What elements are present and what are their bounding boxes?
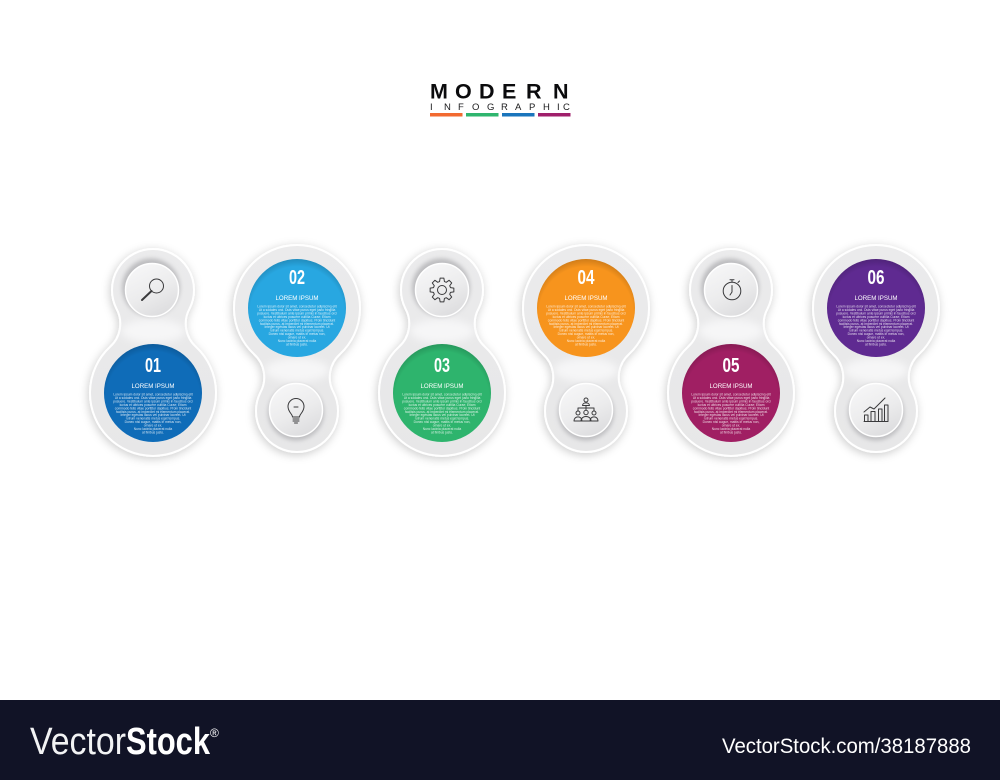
step 04 panel xyxy=(523,245,649,452)
colored circle 04: LOREM IPSUM xyxy=(564,295,608,302)
colored circle 01: Integer egestas lacus vel pulvinar laoreet. Ut xyxy=(120,413,186,417)
vectorstock logo xyxy=(30,721,219,763)
colored circle 05: rutrum venenatis metus eget tempus. xyxy=(704,417,758,421)
colored circle 03: Ut a sodales orci. Duis vitae purus eget justo fringilla xyxy=(404,396,480,400)
colored circle 06: at finibus justo. xyxy=(865,342,887,346)
footer: watermark bar xyxy=(0,700,1000,780)
button with growth chart icon xyxy=(848,384,904,440)
colored circle 03: posuere. Vestibulum ante ipsum primis in faucibus orci xyxy=(402,399,482,403)
colored circle 03: 03 xyxy=(434,355,450,377)
colored circle 01: luctus et ultrices posuere cubilia Curae; Etiam xyxy=(120,403,187,407)
button with team hierarchy icon xyxy=(558,384,614,440)
step 03 panel xyxy=(379,249,505,456)
colored circle 01: commodo felis vitae porttitor dapibus. Proin tincidunt xyxy=(115,406,191,410)
vectorstock logo: Stock xyxy=(126,721,211,763)
vectorstock logo: ® xyxy=(210,726,219,740)
colored circle 05: luctus et ultrices posuere cubilia Curae; Etiam xyxy=(698,403,765,407)
step 01 panel xyxy=(90,249,216,456)
colored circle 04: luctus et ultrices posuere cubilia Curae; Etiam xyxy=(553,315,620,319)
vectorstock logo: Vector xyxy=(30,721,126,763)
colored circle 04: 04 xyxy=(578,267,595,289)
colored circle 03: Nunc lacinia placerat nulla xyxy=(423,427,461,431)
colored circle 05: commodo felis vitae porttitor dapibus. Proin tincidunt xyxy=(693,406,769,410)
colored circle 06: Integer egestas lacus vel pulvinar laoreet. Ut xyxy=(843,325,909,329)
colored circle 06: posuere. Vestibulum ante ipsum primis in faucibus orci xyxy=(836,311,916,315)
colored circle 05: posuere. Vestibulum ante ipsum primis in faucibus orci xyxy=(691,399,771,403)
colored circle 05: at finibus justo. xyxy=(720,430,742,434)
colored circle 05: Integer egestas lacus vel pulvinar laoreet. Ut xyxy=(698,413,764,417)
button with stopwatch icon xyxy=(701,258,759,316)
colored circle 06: commodo felis vitae porttitor dapibus. Proin tincidunt xyxy=(838,318,914,322)
colored circle 05: facilisis purus, at imperdiet mi elementum placerat. xyxy=(694,410,768,414)
title: modern infographic logo xyxy=(430,80,570,116)
colored circle 03: ornare ut ex. xyxy=(433,424,451,428)
colored circle 06: Ut a sodales orci. Duis vitae purus eget justo fringilla xyxy=(838,308,914,312)
colored circle 02: posuere. Vestibulum ante ipsum primis in faucibus orci xyxy=(257,311,337,315)
colored circle 03: Lorem ipsum dolor sit amet, consectetur adipiscing elit xyxy=(402,392,482,396)
colored circle 05: Nunc lacinia placerat nulla xyxy=(712,427,750,431)
colored circle 01 xyxy=(104,344,202,442)
colored circle 04 xyxy=(537,259,635,357)
vectorstock image id: VectorStock.com/38187888 xyxy=(722,735,971,758)
colored circle 04: commodo felis vitae porttitor dapibus. Proin tincidunt xyxy=(548,318,624,322)
colored circle 04: Donec nisl augue, mattis in metus non, xyxy=(558,332,614,336)
colored circle 01: Ut a sodales orci. Duis vitae purus eget justo fringilla xyxy=(115,396,191,400)
colored circle 03: commodo felis vitae porttitor dapibus. Proin tincidunt xyxy=(404,406,480,410)
colored circle 02: 02 xyxy=(289,267,305,289)
colored circle 02: LOREM IPSUM xyxy=(276,295,318,302)
colored circle 03: facilisis purus, at imperdiet mi elementum placerat. xyxy=(405,410,479,414)
step 06 panel xyxy=(813,245,939,452)
colored circle 06: 06 xyxy=(868,267,884,289)
colored circle 05: LOREM IPSUM xyxy=(710,383,752,390)
colored circle 04: Ut a sodales orci. Duis vitae purus eget justo fringilla xyxy=(548,308,624,312)
colored circle 02: Donec nisl augue, mattis in metus non, xyxy=(269,332,325,336)
colored circle 05: ornare ut ex. xyxy=(722,424,740,428)
title: modern infographic logo: MODERN xyxy=(430,80,569,104)
colored circle 06: Donec nisl augue, mattis in metus non, xyxy=(848,332,904,336)
colored circle 02: at finibus justo. xyxy=(286,342,308,346)
colored circle 01: 01 xyxy=(145,355,161,377)
colored circle 05: 05 xyxy=(722,355,740,377)
colored circle 02: ornare ut ex. xyxy=(288,336,306,340)
colored circle 04: Lorem ipsum dolor sit amet, consectetur adipiscing elit xyxy=(546,304,626,308)
colored circle 01: at finibus justo. xyxy=(142,430,164,434)
colored circle 01: ornare ut ex. xyxy=(144,424,162,428)
colored circle 05: Ut a sodales orci. Duis vitae purus eget justo fringilla xyxy=(693,396,769,400)
colored circle 05: Lorem ipsum dolor sit amet, consectetur adipiscing elit xyxy=(691,392,771,396)
colored circle 06: facilisis purus, at imperdiet mi elementum placerat. xyxy=(839,322,913,326)
colored circle 03: luctus et ultrices posuere cubilia Curae; Etiam xyxy=(409,403,476,407)
colored circle 01: posuere. Vestibulum ante ipsum primis in faucibus orci xyxy=(113,399,193,403)
colored circle 02: Nunc lacinia placerat nulla xyxy=(278,339,316,343)
colored circle 05: Donec nisl augue, mattis in metus non, xyxy=(703,420,759,424)
colored circle 04: posuere. Vestibulum ante ipsum primis in faucibus orci xyxy=(546,311,626,315)
colored circle 06: rutrum venenatis metus eget tempus. xyxy=(849,329,903,333)
colored circle 03: Integer egestas lacus vel pulvinar laoreet. Ut xyxy=(409,413,475,417)
colored circle 02 xyxy=(248,259,346,357)
colored circle 04: Integer egestas lacus vel pulvinar laoreet. Ut xyxy=(553,325,619,329)
colored circle 02: luctus et ultrices posuere cubilia Curae; Etiam xyxy=(264,315,331,319)
step 02 panel xyxy=(234,245,360,452)
colored circle 04: ornare ut ex. xyxy=(577,336,595,340)
colored circle 01: Donec nisl augue, mattis in metus non, xyxy=(125,420,181,424)
colored circle 05 xyxy=(682,344,780,442)
colored circle 02: Integer egestas lacus vel pulvinar laoreet. Ut xyxy=(264,325,330,329)
button with light bulb icon xyxy=(268,384,324,440)
title: modern infographic logo: INFOGRAPHIC xyxy=(430,102,570,113)
button with magnifier icon xyxy=(122,258,180,316)
colored circle 06: LOREM IPSUM xyxy=(854,295,898,302)
colored circle 01: Lorem ipsum dolor sit amet, consectetur adipiscing elit xyxy=(113,392,193,396)
step 05 panel xyxy=(668,249,794,456)
colored circle 01: rutrum venenatis metus eget tempus. xyxy=(126,417,180,421)
colored circle 02: commodo felis vitae porttitor dapibus. Proin tincidunt xyxy=(259,318,335,322)
colored circle 03: Donec nisl augue, mattis in metus non, xyxy=(414,420,470,424)
colored circle 02: Ut a sodales orci. Duis vitae purus eget justo fringilla xyxy=(259,308,335,312)
colored circle 03 xyxy=(393,344,491,442)
colored circle 06: Nunc lacinia placerat nulla xyxy=(857,339,895,343)
colored circle 02: facilisis purus, at imperdiet mi elementum placerat. xyxy=(260,322,334,326)
colored circle 04: rutrum venenatis metus eget tempus. xyxy=(559,329,613,333)
colored circle 06 xyxy=(827,259,925,357)
colored circle 02: rutrum venenatis metus eget tempus. xyxy=(270,329,324,333)
colored circle 01: LOREM IPSUM xyxy=(132,383,174,390)
colored circle 04: Nunc lacinia placerat nulla xyxy=(567,339,605,343)
colored circle 01: facilisis purus, at imperdiet mi elementum placerat. xyxy=(116,410,190,414)
colored circle 04: at finibus justo. xyxy=(575,342,597,346)
colored circle 06: ornare ut ex. xyxy=(867,336,885,340)
button with gear icon xyxy=(412,258,470,316)
colored circle 03: at finibus justo. xyxy=(431,430,453,434)
colored circle 04: facilisis purus, at imperdiet mi elementum placerat. xyxy=(549,322,623,326)
colored circle 03: rutrum venenatis metus eget tempus. xyxy=(415,417,469,421)
colored circle 03: LOREM IPSUM xyxy=(420,383,464,390)
colored circle 02: Lorem ipsum dolor sit amet, consectetur adipiscing elit xyxy=(257,304,337,308)
colored circle 06: Lorem ipsum dolor sit amet, consectetur adipiscing elit xyxy=(836,304,916,308)
colored circle 01: Nunc lacinia placerat nulla xyxy=(134,427,172,431)
colored circle 06: luctus et ultrices posuere cubilia Curae; Etiam xyxy=(843,315,910,319)
